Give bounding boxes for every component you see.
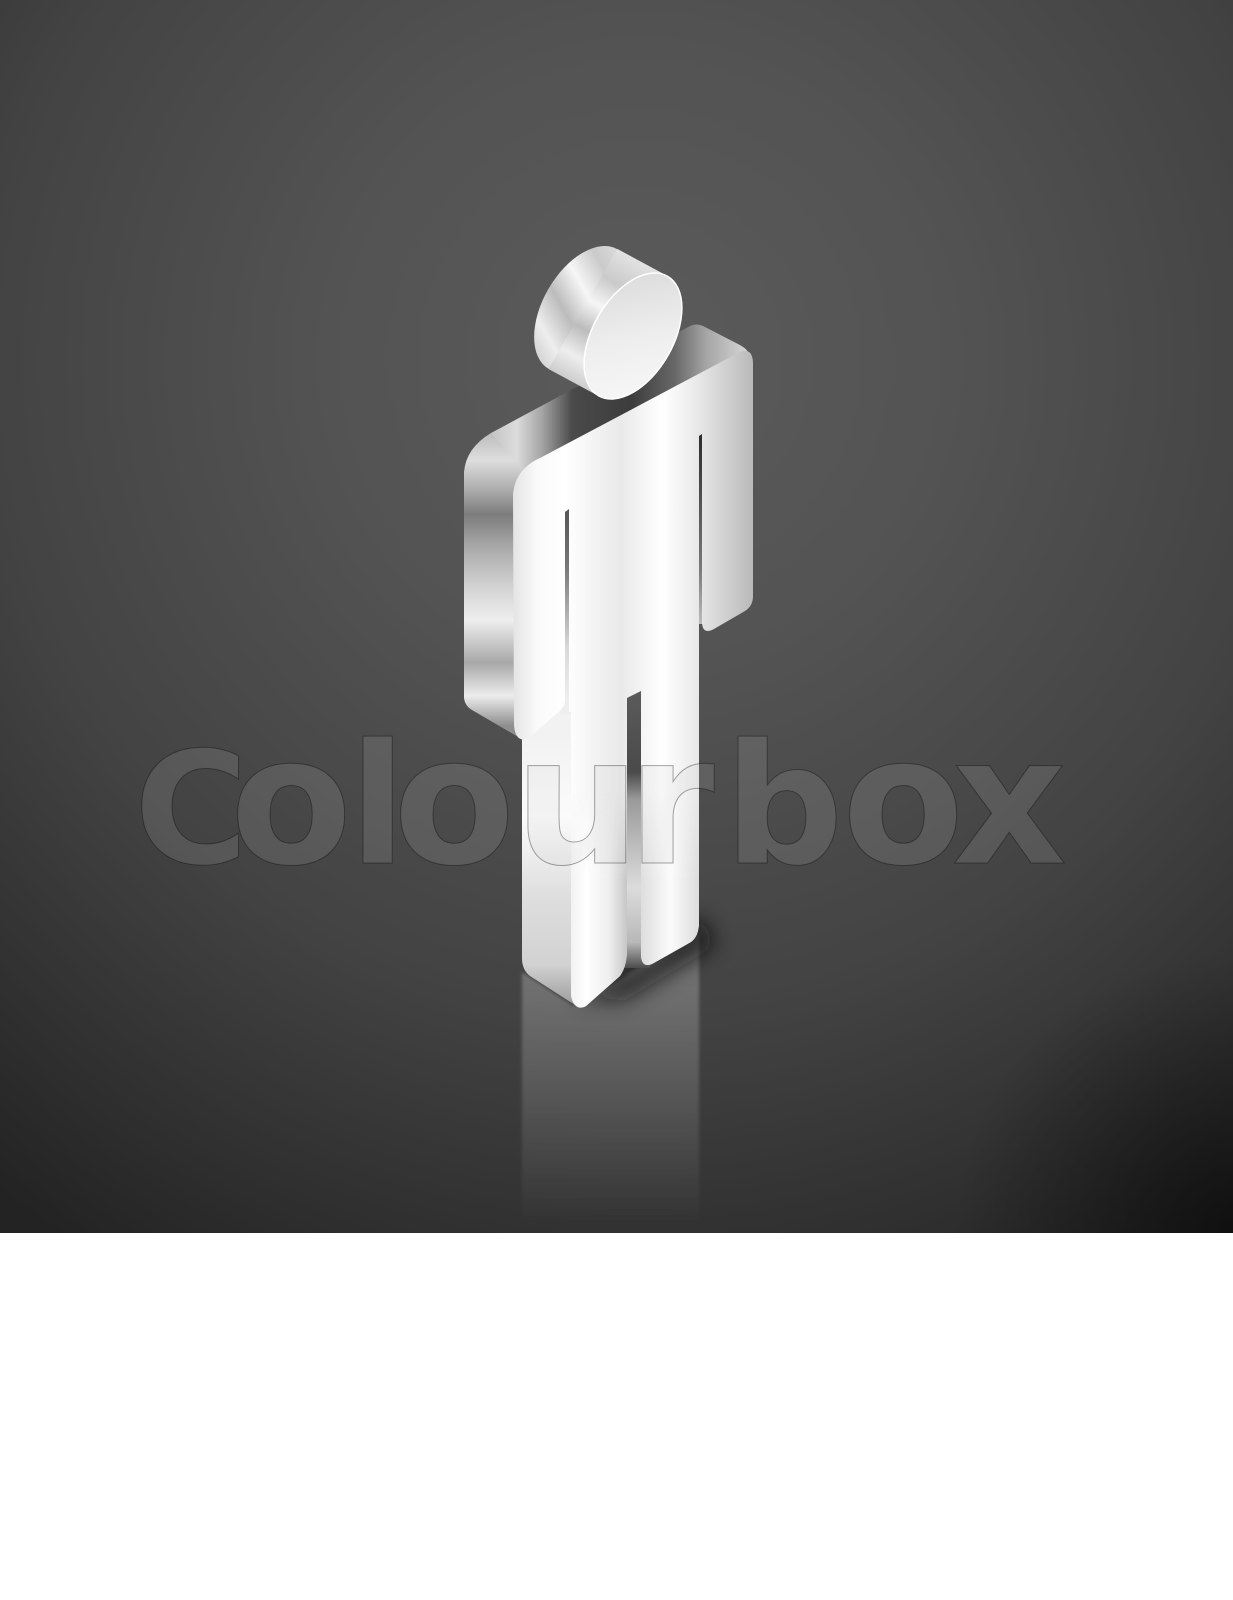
Colourbox watermark: u [514, 698, 641, 905]
Colourbox watermark: o [393, 698, 515, 905]
Colourbox watermark: b [724, 709, 844, 903]
Colourbox watermark: r [627, 698, 715, 905]
slit beside the left arm [560, 509, 574, 714]
isometric person figure [464, 229, 760, 1020]
Colourbox watermark: o [230, 698, 352, 905]
gap between the legs [620, 692, 650, 968]
back of head cylinder [514, 229, 652, 389]
Colourbox watermark: x [952, 698, 1067, 905]
Colourbox watermark: l [349, 709, 406, 903]
dark gradient background panel [0, 0, 1233, 1233]
contact shadow at the feet [575, 915, 716, 1000]
Colourbox watermark: o [842, 698, 964, 905]
front face: torso, arms and legs [505, 340, 760, 1020]
leg side face [522, 690, 590, 1005]
slit beside the right arm [692, 432, 707, 624]
arm and torso side face [464, 433, 540, 738]
shoulder top face [491, 324, 748, 470]
Colourbox watermark: C [134, 718, 248, 900]
head cylinder side [548, 249, 668, 396]
floor reflection of the figure [522, 932, 699, 1225]
head front disc [564, 256, 702, 416]
leg shading on the front face [571, 810, 699, 1008]
